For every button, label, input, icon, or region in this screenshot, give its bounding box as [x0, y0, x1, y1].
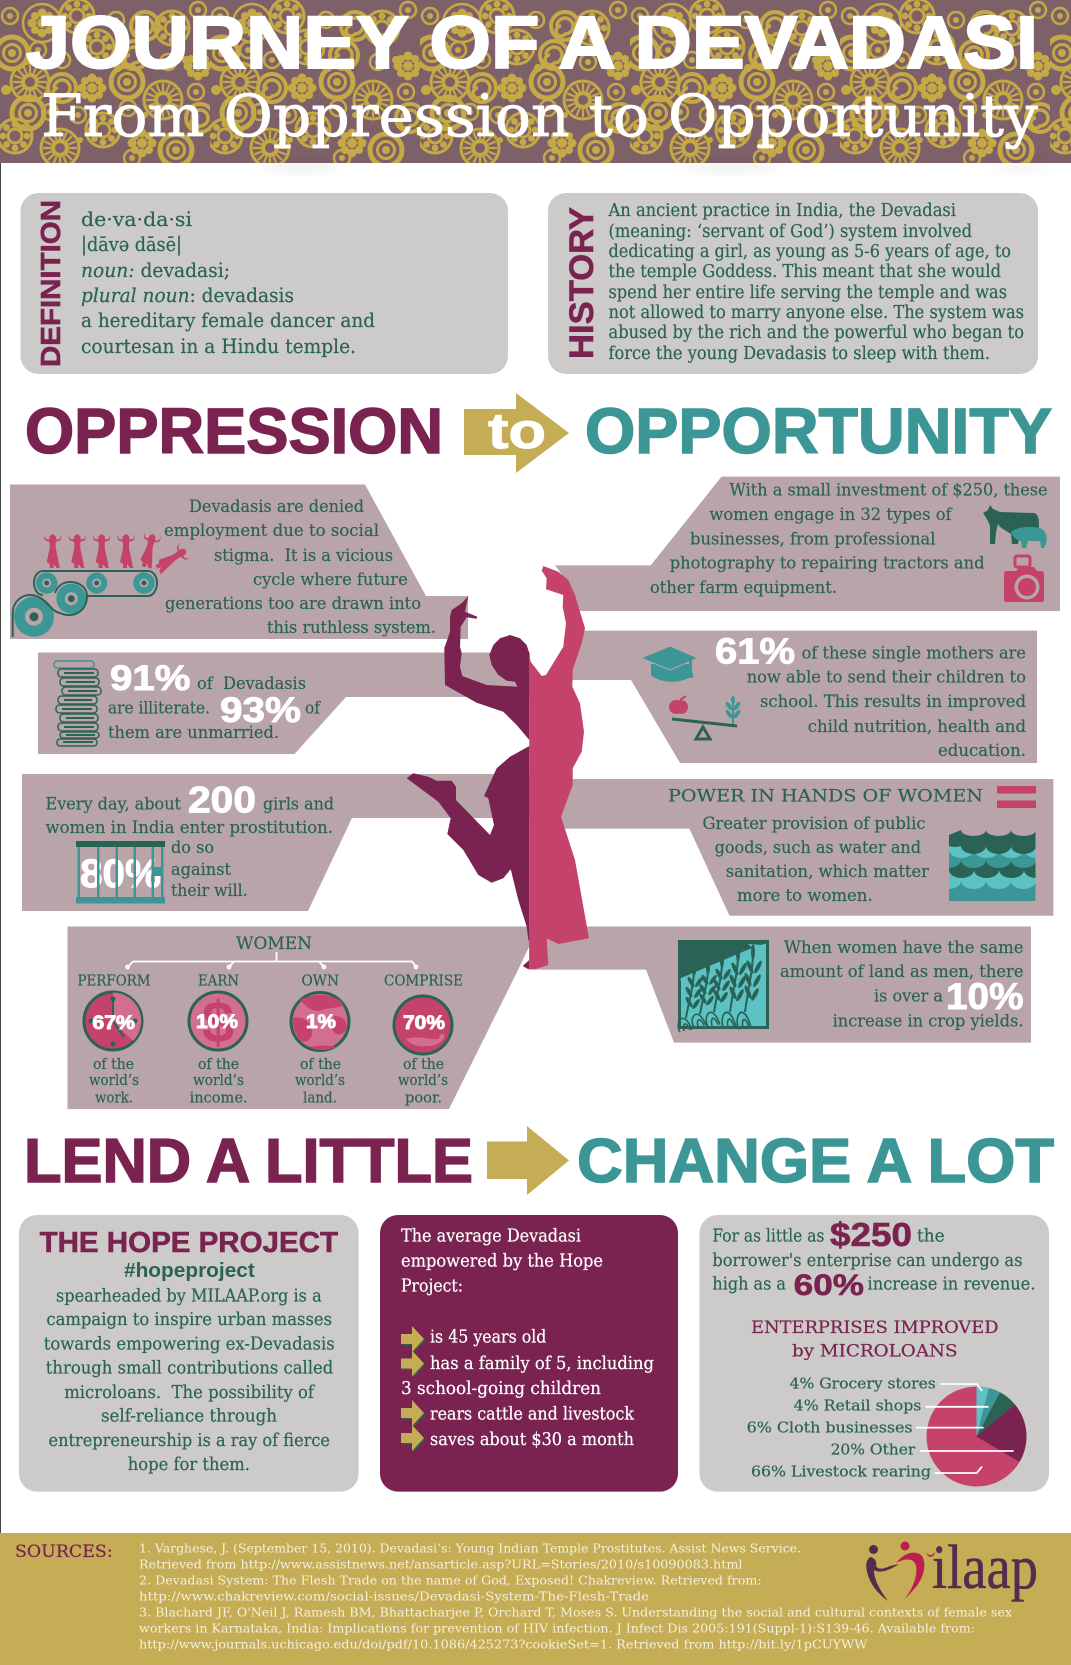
- pie legend: 66% Livestock rearing: [751, 1465, 931, 1481]
- column: comprise: world’s: [398, 1073, 448, 1089]
- panel: crop yields: [530, 926, 1031, 1043]
- panel: history: [548, 193, 1038, 374]
- icon: hand: 70%: [403, 1013, 445, 1034]
- arrow: to: [464, 393, 569, 473]
- investment text: businesses, from professional: [690, 530, 936, 550]
- panel: the hope project: [19, 1215, 359, 1492]
- stat: 10%: 10%: [946, 976, 1024, 1017]
- prostitution text: women in India enter prostitution.: [46, 818, 333, 838]
- arrow: [487, 1126, 569, 1195]
- column: own: world’s: [295, 1073, 345, 1089]
- column: comprise: [384, 974, 463, 1106]
- panel: social stigma: [10, 484, 468, 639]
- school text: [747, 644, 1026, 761]
- hope text: [44, 1285, 335, 1475]
- column: earn: EARN: [198, 974, 239, 990]
- power text: [702, 814, 930, 906]
- silhouette: empowered half: [529, 566, 589, 969]
- school text: now able to send their children to: [747, 668, 1026, 688]
- revenue text: $250: [830, 1216, 912, 1253]
- definition text: de·va·da·si: [81, 207, 192, 231]
- illiteracy text: of: [305, 698, 322, 718]
- dancer silhouette: [407, 566, 589, 969]
- history label: HISTORY: [563, 207, 601, 359]
- investment text: With a small investment of $250, these: [729, 481, 1048, 501]
- column: comprise: COMPRISE: [384, 974, 463, 990]
- panel: investment: [555, 477, 1060, 611]
- history text: force the young Devadasis to sleep with them.: [608, 344, 990, 364]
- change a lot: CHANGE A LOT: [577, 1127, 1054, 1196]
- icon: wheat growth chart: [678, 942, 768, 1032]
- crop text: amount of land as men, there: [780, 962, 1024, 982]
- power text: sanitation, which matter: [726, 862, 930, 882]
- stigma text: stigma. It is a vicious: [214, 546, 393, 566]
- column: perform: [78, 974, 151, 1106]
- pie legend: 20% Other: [831, 1442, 915, 1458]
- logo: milaap: [866, 1534, 1038, 1602]
- icon: clock: 67%: [92, 1013, 135, 1034]
- stat: 80% in jail icon: 80%: [80, 852, 161, 896]
- column: comprise: poor.: [405, 1090, 442, 1106]
- silhouette: oppressed half: [407, 596, 533, 969]
- column: own: of the: [300, 1057, 341, 1073]
- definition text: |dāvə dāsē|: [81, 232, 182, 257]
- bullet list: rears cattle and livestock: [430, 1404, 635, 1425]
- panel: definition: [20, 193, 508, 374]
- hope heading: THE HOPE PROJECT: [40, 1227, 338, 1259]
- enterprises heading: ENTERPRISES IMPROVED: [751, 1318, 999, 1338]
- investment text: women engage in 32 types of: [709, 505, 953, 525]
- prostitution text: do so: [171, 838, 214, 858]
- crop text: When women have the same: [784, 938, 1024, 958]
- revenue text: high as a: [712, 1274, 786, 1295]
- column: comprise: of the: [403, 1057, 444, 1073]
- subtitle: From Oppression to Opportunity: [41, 82, 1038, 150]
- panel: average devadasi: [380, 1215, 678, 1492]
- icon: waves: [949, 830, 1036, 901]
- panel: illiteracy: [38, 652, 530, 754]
- school text: education.: [938, 741, 1026, 761]
- average intro text: empowered by the Hope: [401, 1251, 603, 1272]
- prostitution text: [46, 794, 334, 901]
- definition text: a hereditary female dancer and: [81, 308, 375, 332]
- sources band: [0, 1533, 1071, 1665]
- column: earn: [189, 974, 248, 1106]
- women heading: WOMEN: [236, 934, 312, 954]
- column: perform: PERFORM: [78, 974, 151, 990]
- revenue text: For as little as: [712, 1226, 824, 1247]
- hope text: campaign to inspire urban masses: [46, 1309, 332, 1330]
- enterprises heading: by MICROLOANS: [792, 1341, 958, 1361]
- pie chart: [916, 1384, 1026, 1486]
- pie legend: 6% Cloth businesses: [747, 1420, 913, 1436]
- column: own: land.: [303, 1090, 337, 1106]
- stigma text: employment due to social: [164, 521, 379, 541]
- opportunity word: OPPORTUNITY: [585, 395, 1052, 467]
- prostitution text: against: [171, 860, 231, 880]
- average intro text: Project:: [401, 1276, 463, 1297]
- column: earn: world’s: [193, 1073, 244, 1089]
- hope text: spearheaded by MILAAP.org is a: [56, 1285, 322, 1306]
- bullet list: 3 school-going children: [401, 1378, 601, 1399]
- definition label: DEFINITION: [35, 200, 66, 367]
- icon: dollar: [189, 990, 247, 1055]
- bullet list: [401, 1326, 654, 1452]
- average intro text: [401, 1226, 603, 1297]
- definition text: [81, 207, 375, 358]
- history text: [608, 201, 1024, 364]
- crop text: increase in crop yields.: [833, 1011, 1024, 1031]
- history text: dedicating a girl, as young as 5-6 years of age, to: [608, 242, 1011, 262]
- history text: spend her entire life serving the temple and was: [608, 283, 1007, 303]
- definition text: noun: devadasi;: [81, 258, 230, 282]
- crop text: is over a: [874, 986, 943, 1006]
- revenue text: borrower's enterprise can undergo as: [712, 1250, 1022, 1271]
- sources list: Retrieved from http://www.assistnews.net/ansarticle.asp?URL=Stories/2010/s10090083.html: [139, 1557, 743, 1572]
- investment text: other farm equipment.: [650, 578, 837, 598]
- stat: 93%: 93%: [220, 691, 301, 730]
- hope text: through small contributions called: [46, 1358, 333, 1379]
- icon: globe: 1%: [306, 1012, 336, 1033]
- header banner: [0, 0, 1071, 174]
- stat: 200: 200: [188, 780, 256, 821]
- hope text: towards empowering ex-Devadasis: [44, 1333, 335, 1354]
- icon: dollar: 10%: [196, 1012, 238, 1033]
- illiteracy text: are illiterate.: [108, 698, 210, 718]
- revenue text: the: [917, 1226, 945, 1247]
- panel: children school: [570, 631, 1037, 763]
- stigma text: generations too are drawn into: [165, 594, 421, 614]
- icon: equals: [997, 786, 1036, 808]
- enterprises heading: [751, 1318, 999, 1361]
- icon: cow and pig: [983, 505, 1047, 548]
- definition text: plural noun: devadasis: [81, 283, 294, 307]
- power heading: POWER IN HANDS OF WOMEN: [668, 787, 983, 807]
- panel: women statistics: [68, 926, 530, 1109]
- column: perform: of the: [93, 1057, 134, 1073]
- hope text: self-reliance through: [101, 1406, 277, 1427]
- average intro text: The average Devadasi: [401, 1226, 581, 1247]
- connector tree: [126, 952, 417, 968]
- bullet list: has a family of 5, including: [430, 1353, 654, 1374]
- icon: dollar: $: [202, 990, 234, 1055]
- hope text: entrepreneurship is a ray of fierce: [48, 1430, 330, 1451]
- school text: of these single mothers are: [802, 644, 1026, 664]
- investment text: photography to repairing tractors and: [670, 554, 985, 574]
- history text: (meaning: ‘servant of God’) system involved: [608, 222, 972, 242]
- panel: enterprises: [700, 1215, 1049, 1492]
- icon: camera: [1004, 556, 1044, 602]
- sources label: SOURCES:: [15, 1542, 113, 1562]
- icon: scale with apple and plant: [669, 696, 742, 739]
- column: own: [291, 974, 349, 1106]
- revenue text: 60%: [794, 1269, 864, 1302]
- icon: conveyor belt with dancers: [13, 532, 191, 637]
- stat: 80% in jail icon: [76, 841, 165, 904]
- panel: power in hands of women: [555, 779, 1071, 916]
- stat: 61%: 61%: [715, 631, 795, 672]
- definition text: courtesan in a Hindu temple.: [81, 334, 356, 358]
- stigma text: Devadasis are denied: [189, 497, 364, 517]
- heading: oppression to opportunity: [25, 393, 1052, 473]
- school text: child nutrition, health and: [808, 717, 1026, 737]
- investment text: [650, 481, 1048, 598]
- bullet list: saves about $30 a month: [430, 1429, 634, 1450]
- logo: milaap: ilaap: [932, 1534, 1038, 1602]
- column: perform: work.: [95, 1090, 133, 1106]
- arrow: to: to: [488, 403, 546, 459]
- sources list: 3. Blachard JF, O'Neil J, Ramesh BM, Bhattacharjee P, Orchard T, Moses S. Understanding the social and cultural contexts of female sex: [139, 1605, 1012, 1620]
- title: JOURNEY OF A DEVADASI: [26, 1, 1038, 84]
- column: earn: of the: [198, 1057, 239, 1073]
- stigma text: [164, 497, 436, 638]
- school text: school. This results in improved: [760, 692, 1026, 712]
- history text: An ancient practice in India, the Devadasi: [608, 201, 956, 221]
- stigma text: this ruthless system.: [267, 618, 436, 638]
- column: perform: world’s: [89, 1073, 139, 1089]
- sources list: http://www.chakreview.com/social-issues/Devadasi-System-The-Flesh-Trade: [139, 1589, 649, 1604]
- pie legend: 4% Retail shops: [794, 1399, 921, 1415]
- sources list: 2. Devadasi System: The Flesh Trade on the name of God, Exposed! Chakreview. Retrieved from:: [139, 1573, 762, 1588]
- power text: goods, such as water and: [715, 838, 921, 858]
- bullet list: is 45 years old: [430, 1326, 546, 1348]
- illiteracy text: [108, 674, 322, 743]
- history text: not allowed to marry anyone else. The system was: [608, 303, 1024, 323]
- icon: graduation cap: [641, 646, 698, 682]
- hope text: hope for them.: [128, 1454, 250, 1475]
- heading: lend a little change a lot: [24, 1126, 1054, 1196]
- pie legend: [747, 1376, 936, 1481]
- column: earn: income.: [190, 1090, 248, 1106]
- illiteracy text: them are unmarried.: [108, 723, 279, 743]
- sources list: workers in Karnataka, India: Implications for prevention of HIV infection. J Infect Dis 2005:191(Suppl-1):S139-46. Available from:: [139, 1621, 975, 1636]
- icon: stack of books: [54, 661, 101, 746]
- illiteracy text: of Devadasis: [197, 674, 306, 694]
- revenue text: increase in revenue.: [868, 1274, 1036, 1295]
- prostitution text: their will.: [171, 881, 248, 901]
- sources list: http://www.journals.uchicago.edu/doi/pdf/10.1086/425273?cookieSet=1. Retrieved from http://bit.ly/1pCUYWW: [139, 1637, 868, 1652]
- stat: 91%: 91%: [110, 659, 190, 698]
- oppression word: OPPRESSION: [25, 395, 443, 467]
- crop text: [780, 938, 1024, 1031]
- revenue text: [712, 1216, 1036, 1302]
- stigma text: cycle where future: [253, 570, 408, 590]
- pie legend: 4% Grocery stores: [790, 1376, 936, 1392]
- history text: the temple Goddess. This meant that she would: [608, 262, 1001, 282]
- sources list: 1. Varghese, J. (September 15, 2010). Devadasi’s: Young Indian Temple Prostitutes. Assist News Service.: [139, 1541, 801, 1556]
- column: own: OWN: [302, 974, 339, 990]
- lend a little: LEND A LITTLE: [24, 1127, 473, 1196]
- panel: prostitution: [22, 774, 530, 911]
- history text: abused by the rich and the powerful who began to: [608, 323, 1024, 343]
- hashtag: #hopeproject: [124, 1260, 255, 1282]
- hope text: microloans. The possibility of: [64, 1382, 315, 1403]
- power text: Greater provision of public: [702, 814, 926, 834]
- prostitution text: girls and: [263, 794, 334, 814]
- power text: more to women.: [737, 886, 873, 906]
- sources list: [139, 1541, 1012, 1652]
- prostitution text: Every day, about: [46, 794, 181, 814]
